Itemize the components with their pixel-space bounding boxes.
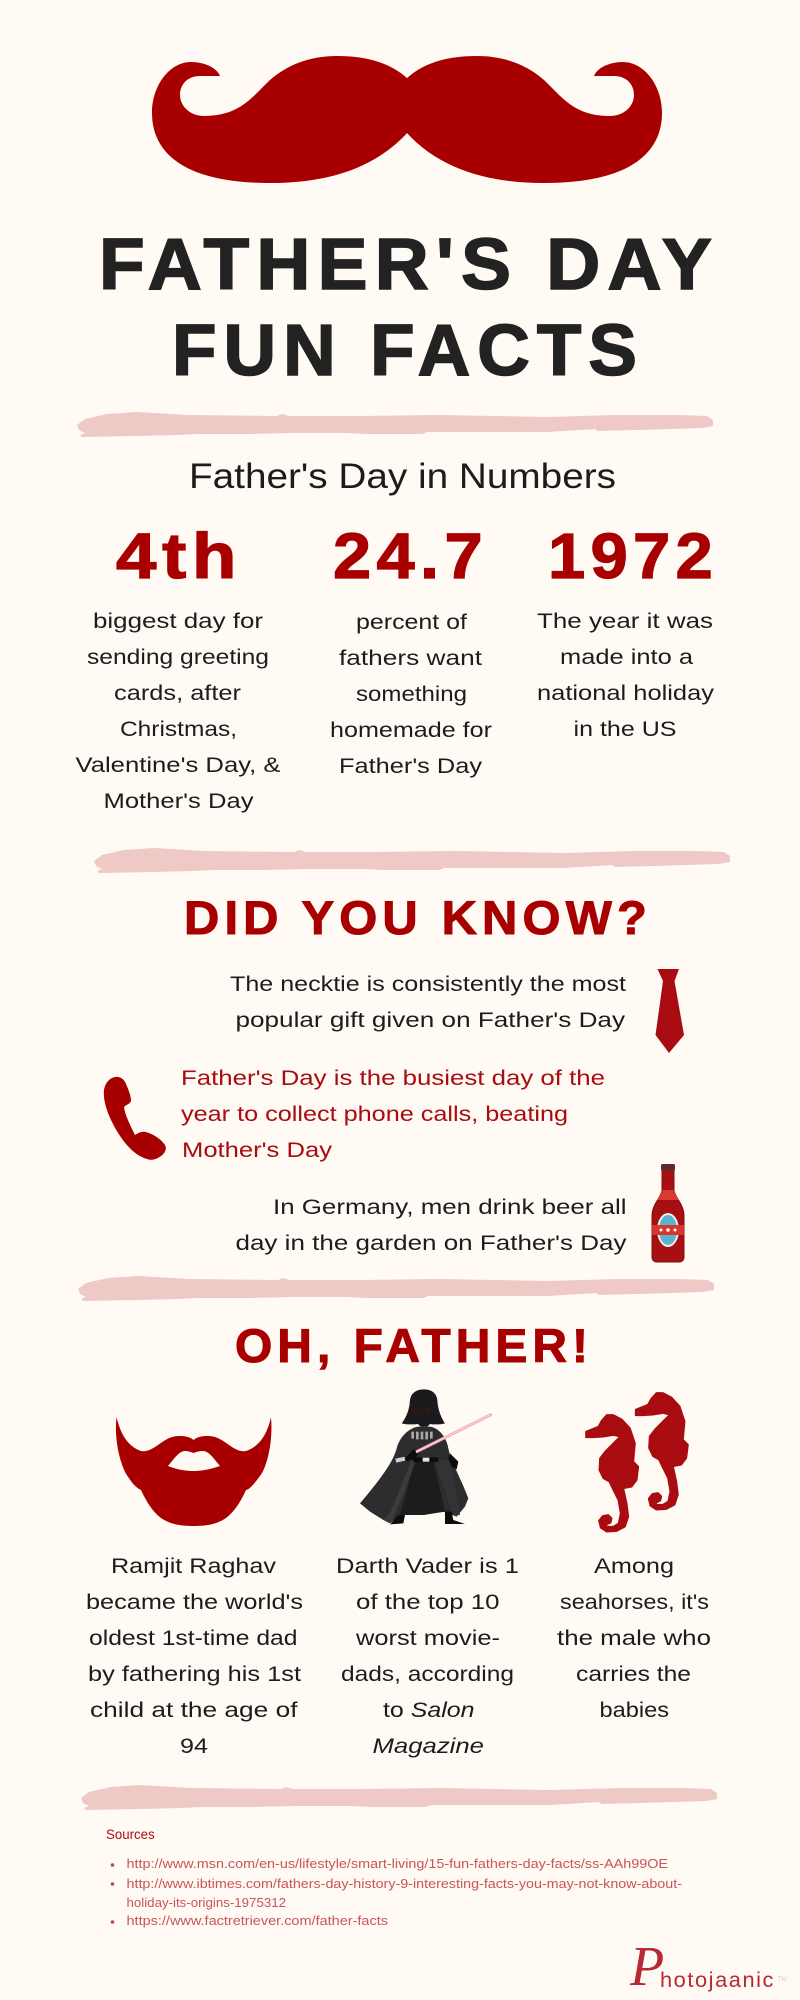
logo: photojaanic [629, 1936, 787, 1998]
stat: 24.7: something [356, 682, 467, 706]
stat: 4th [76, 520, 280, 813]
stat: 4th: sending greeting [87, 645, 269, 669]
fact: necktie [230, 972, 626, 1032]
fact: phone calls [181, 1066, 605, 1162]
sources [106, 1826, 682, 1928]
fact: darth vader: to Salon [383, 1698, 474, 1722]
fact: darth vader: of the top 10 [356, 1590, 500, 1614]
fact: seahorses: Among [594, 1554, 674, 1578]
sources: Sources [106, 1826, 155, 1842]
fact: darth vader: dads, according [341, 1662, 514, 1686]
stat: 4th: Valentine's Day, & [76, 753, 280, 777]
fact: phone calls: year to collect phone calls, beating [181, 1102, 568, 1126]
stat: 1972: 1972 [548, 520, 718, 592]
stat: 24.7: homemade for [330, 718, 492, 742]
stat: 24.7: Father's Day [339, 754, 482, 778]
panel: numbers [76, 520, 718, 813]
icon: seahorses [586, 1393, 688, 1532]
fact: darth vader: Magazine [372, 1734, 484, 1758]
fact: seahorses: carries the [576, 1662, 691, 1686]
icon: necktie [656, 969, 684, 1053]
sources: http://www.ibtimes.com/fathers-day-history-9-interesting-facts-you-may-not-know-about- [126, 1876, 682, 1891]
title: FUN FACTS [172, 311, 644, 391]
stat: 4th: Christmas, [120, 717, 237, 741]
sources: http://www.msn.com/en-us/lifestyle/smart-living/15-fun-fathers-day-facts/ss-AAh99OE [126, 1856, 668, 1871]
stat: 1972: The year it was [537, 609, 713, 633]
sources: holiday-its-origins-1975312 [126, 1895, 286, 1910]
stat: 4th: Mother's Day [104, 789, 254, 813]
icon: beer bottle [652, 1164, 684, 1262]
icon: beard [116, 1417, 271, 1526]
fact: ramjit raghav: became the world's [86, 1590, 303, 1614]
heading: did you know: DID YOU KNOW? [184, 892, 652, 945]
fact: seahorses: seahorses, it's [560, 1590, 709, 1614]
fact: necktie: popular gift given on Father's Day [236, 1008, 625, 1032]
stat: 1972: national holiday [537, 681, 714, 705]
fact: seahorses: babies [600, 1698, 669, 1722]
sources: https://www.factretriever.com/father-facts [126, 1913, 389, 1928]
stat: 1972: made into a [560, 645, 693, 669]
logo: photojaanic: TM [778, 1977, 787, 1983]
fact: darth vader [336, 1554, 519, 1758]
fact: ramjit raghav: 94 [180, 1734, 208, 1758]
fact: ramjit raghav [86, 1554, 303, 1758]
fact: necktie: The necktie is consistently the most [230, 972, 626, 996]
heading: in numbers: Father's Day in Numbers [189, 457, 616, 496]
fact: darth vader: Darth Vader is 1 [336, 1554, 519, 1578]
stat: 4th: biggest day for [93, 609, 263, 633]
fact: phone calls: Mother's Day [182, 1138, 332, 1162]
fact: ramjit raghav: oldest 1st-time dad [89, 1626, 298, 1650]
fact: ramjit raghav: by fathering his 1st [88, 1662, 301, 1686]
stat: 24.7 [330, 520, 492, 778]
stat: 4th: 4th [116, 520, 242, 592]
stat: 4th: cards, after [114, 681, 241, 705]
fact: ramjit raghav: Ramjit Raghav [111, 1554, 276, 1578]
title: FATHER'S DAY [99, 225, 719, 305]
fact: ramjit raghav: child at the age of [90, 1698, 298, 1722]
fact: beer: day in the garden on Father's Day [236, 1231, 627, 1255]
stat: 24.7: 24.7 [333, 520, 488, 592]
fact: beer [236, 1195, 627, 1255]
stat: 1972: in the US [574, 717, 676, 741]
stat: 24.7: fathers want [339, 646, 482, 670]
icon: phone [104, 1077, 166, 1160]
fact: darth vader: worst movie- [355, 1626, 500, 1650]
fact: beer: In Germany, men drink beer all [273, 1195, 626, 1219]
stat: 1972 [537, 520, 718, 741]
title [99, 225, 719, 391]
fact: seahorses: the male who [557, 1626, 711, 1650]
panel: did you know facts [104, 969, 684, 1262]
panel: oh father facts [86, 1389, 711, 1758]
icon: moustache [152, 56, 662, 183]
heading: oh father: OH, FATHER! [235, 1320, 593, 1373]
icon: darth vader [360, 1389, 492, 1524]
logo: photojaanic: P [629, 1936, 664, 1998]
logo: photojaanic: hotojaanic [660, 1969, 775, 1992]
fact: phone calls: Father's Day is the busiest day of the [181, 1066, 605, 1090]
fact: seahorses [557, 1554, 711, 1722]
stat: 24.7: percent of [356, 610, 467, 634]
